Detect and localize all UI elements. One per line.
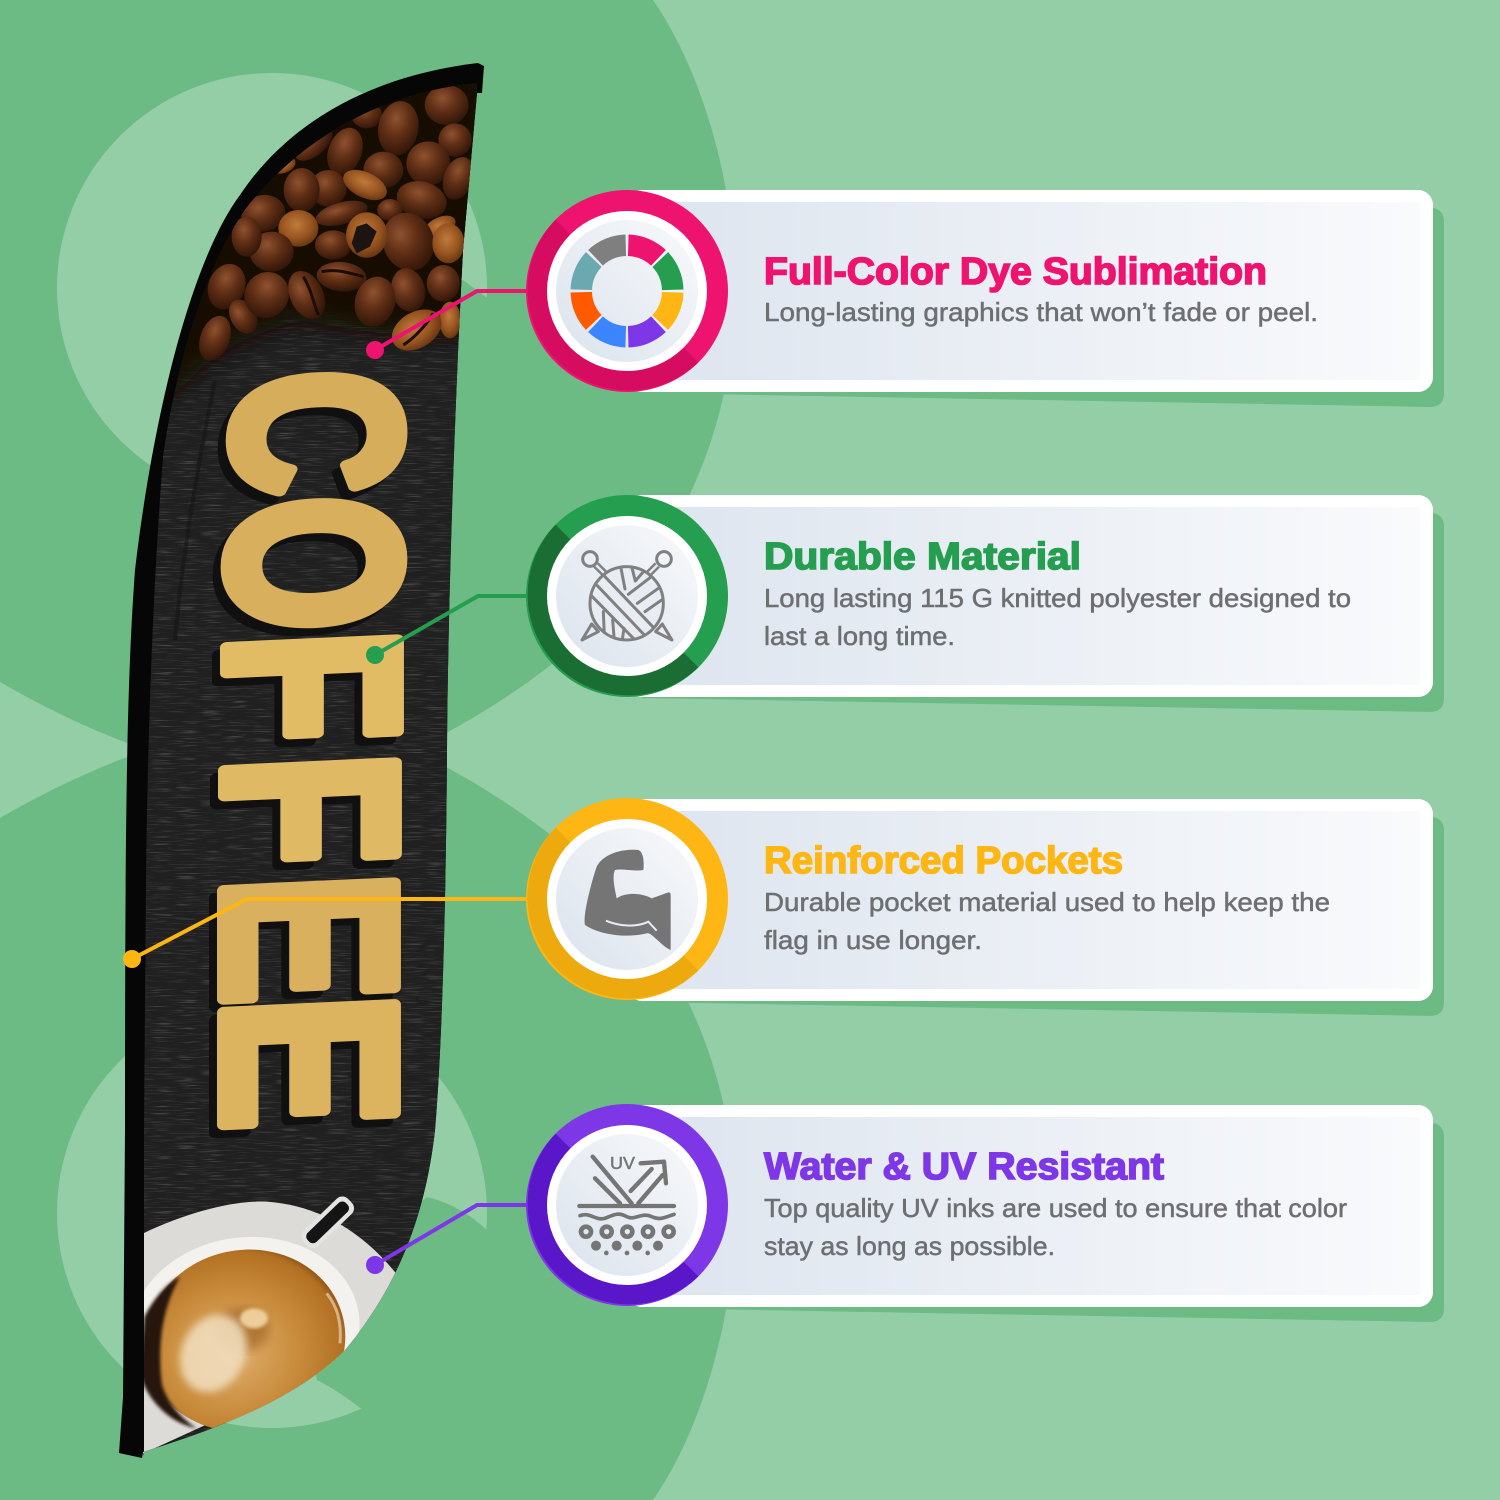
background circle: lower light — [57, 998, 487, 1428]
card body — [627, 495, 1433, 697]
badge ring — [526, 190, 728, 392]
description: flag in use longer. — [764, 925, 982, 955]
connector: yellow — [123, 899, 530, 968]
letter shadows: E — [163, 997, 440, 1143]
feather flag — [118, 60, 490, 1460]
coffee cup photo — [143, 1196, 396, 1454]
letter faces: F — [175, 625, 450, 748]
description: Long-lasting graphics that won’t fade or peel. — [764, 297, 1318, 327]
panel: Durable Material — [526, 495, 1444, 712]
description: Long lasting 115 G knitted polyester designed to — [764, 583, 1351, 613]
letter faces: F — [173, 748, 448, 871]
letter shadows: O — [170, 498, 442, 645]
card shadow — [640, 817, 1444, 1016]
description — [764, 1193, 1347, 1261]
icon: color wheel — [562, 226, 692, 356]
letter shadows — [163, 372, 442, 1143]
icon: UV protection: UV — [610, 1153, 635, 1173]
description: Durable pocket material used to help keep the — [764, 887, 1330, 917]
letter faces: O — [178, 490, 450, 637]
connector: purple — [366, 1205, 530, 1274]
icon: flexed arm — [585, 850, 671, 950]
letter faces: E — [171, 867, 446, 1009]
heading: Durable Material — [764, 536, 1081, 578]
background circle: upper light — [57, 73, 487, 503]
heading: Full-Color Dye Sublimation — [764, 251, 1267, 293]
badge ring — [526, 1104, 728, 1306]
heading: Water & UV Resistant — [764, 1146, 1164, 1188]
badge ring — [526, 495, 728, 697]
connector: pink — [366, 291, 530, 359]
letter faces — [171, 364, 450, 1135]
panel: Reinforced Pockets — [526, 798, 1444, 1016]
card shadow — [640, 1123, 1444, 1322]
letter shadows: E — [163, 875, 438, 1017]
coffee beans photo — [193, 85, 480, 365]
letter faces: E — [171, 989, 448, 1135]
flag lettering: COFFEE — [163, 364, 450, 1143]
letter shadows: F — [165, 756, 440, 879]
letter shadows: C — [177, 372, 442, 508]
description: last a long time. — [764, 621, 955, 651]
badge ring — [526, 798, 728, 1000]
description — [764, 583, 1351, 651]
background shape: lower dark green — [0, 734, 735, 1500]
flag hem — [119, 63, 484, 1458]
flag fabric panel — [143, 83, 477, 1456]
card body — [627, 799, 1433, 1001]
letter shadows: F — [167, 633, 442, 756]
panel: Water & UV Resistant — [526, 1104, 1444, 1322]
card shadow — [640, 208, 1444, 407]
letter faces: C — [185, 364, 450, 500]
background bite: lower — [300, 1197, 500, 1440]
background shape: upper dark green — [0, 0, 735, 766]
panel: Full-Color Dye Sublimation — [526, 190, 1444, 407]
description: stay as long as possible. — [764, 1231, 1055, 1261]
icon: UV protection — [579, 1153, 674, 1255]
description: Top quality UV inks are used to ensure that color — [764, 1193, 1347, 1223]
background bite: upper — [300, 280, 490, 520]
card body — [627, 1105, 1433, 1307]
heading: Reinforced Pockets — [764, 840, 1123, 882]
card shadow — [640, 513, 1444, 712]
connector: green — [366, 596, 530, 664]
description — [764, 887, 1330, 955]
card body — [627, 190, 1433, 392]
icon: yarn ball and needles — [582, 552, 672, 642]
